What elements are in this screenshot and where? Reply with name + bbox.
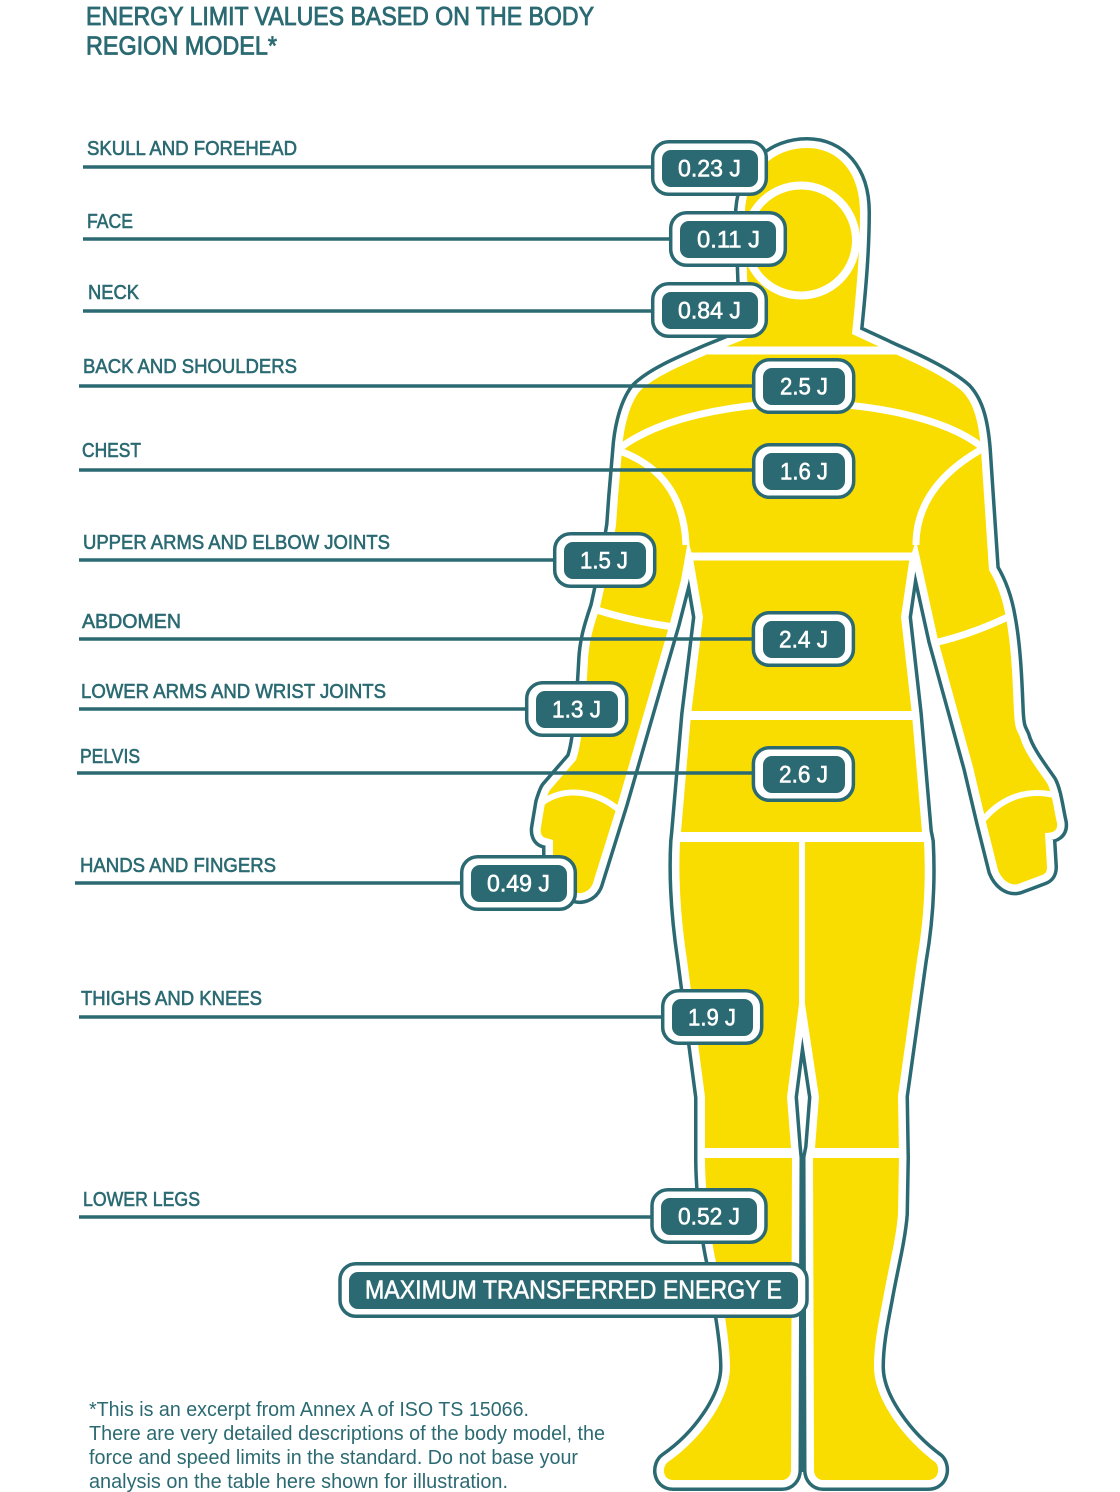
knee left divider xyxy=(700,1148,794,1158)
left wrist divider xyxy=(543,793,619,810)
row: skull and forehead xyxy=(83,138,766,194)
human body figure xyxy=(541,148,1058,1480)
row: hands and fingers: HANDS AND FINGERS xyxy=(80,855,276,877)
row: back and shoulders: BACK AND SHOULDERS xyxy=(83,356,297,378)
knee right divider xyxy=(810,1148,904,1158)
badge 1.9 J xyxy=(663,991,762,1043)
badge 1.6 J: 1.6 J xyxy=(780,458,828,486)
badge 0.52 J xyxy=(652,1190,766,1242)
callout: maximum transferred energy xyxy=(340,1264,807,1316)
row: thighs and knees xyxy=(79,988,762,1043)
badge 1.3 J: 1.3 J xyxy=(552,696,601,724)
badge 2.6 J xyxy=(753,748,853,800)
row: lower arms and wrist joints: LOWER ARMS AND WRIST JOINTS xyxy=(81,681,386,703)
row: pelvis xyxy=(77,746,853,800)
badge 1.5 J xyxy=(555,534,655,586)
badge 2.4 J: 2.4 J xyxy=(779,626,828,654)
right elbow divider xyxy=(934,616,1010,643)
footnote xyxy=(89,1398,605,1492)
badge 0.23 J xyxy=(653,142,766,194)
neck / back divider xyxy=(708,346,896,354)
centre thigh divider xyxy=(799,840,805,1010)
row: back and shoulders xyxy=(79,356,854,412)
back / chest divider xyxy=(620,402,982,448)
badge 2.6 J: 2.6 J xyxy=(779,762,828,788)
title: REGION MODEL* xyxy=(86,30,277,60)
row: chest: CHEST xyxy=(82,440,141,462)
row: lower legs: LOWER LEGS xyxy=(83,1189,200,1211)
badge 0.84 J xyxy=(653,284,766,336)
row: chest xyxy=(79,440,854,497)
badge 0.84 J: 0.84 J xyxy=(678,298,741,324)
row: lower legs xyxy=(79,1189,766,1242)
left shoulder to armpit line xyxy=(620,451,686,545)
abdomen / pelvis divider xyxy=(686,711,918,720)
right wrist divider xyxy=(983,793,1058,820)
row: hands and fingers xyxy=(75,855,575,909)
row: lower arms and wrist joints xyxy=(79,681,627,735)
footnote: force and speed limits in the standard. Do not base your xyxy=(89,1446,578,1469)
row: neck: NECK xyxy=(88,282,140,304)
row: abdomen: ABDOMEN xyxy=(82,611,181,633)
title xyxy=(86,1,594,60)
chest / abdomen divider xyxy=(686,552,916,560)
row: neck xyxy=(83,282,766,336)
badge 0.11 J: 0.11 J xyxy=(697,226,760,254)
row: upper arms and elbow joints xyxy=(79,532,655,586)
row: thighs and knees: THIGHS AND KNEES xyxy=(81,988,262,1010)
badge 0.49 J xyxy=(462,857,575,909)
badge 0.49 J: 0.49 J xyxy=(487,870,550,898)
row: abdomen xyxy=(79,611,853,665)
badge 0.23 J: 0.23 J xyxy=(678,156,741,182)
left elbow divider xyxy=(597,610,674,627)
callout: maximum transferred energy: MAXIMUM TRANSFERRED ENERGY E xyxy=(365,1276,782,1304)
row: skull and forehead: SKULL AND FOREHEAD xyxy=(87,138,297,160)
badge 1.5 J: 1.5 J xyxy=(580,548,628,574)
row: face xyxy=(83,211,785,265)
footnote: There are very detailed descriptions of the body model, the xyxy=(89,1422,605,1445)
badge 1.9 J: 1.9 J xyxy=(688,1004,736,1032)
badge 1.3 J xyxy=(527,683,627,735)
pelvis / thigh divider xyxy=(678,832,926,842)
face region outline xyxy=(746,186,856,296)
footnote: *This is an excerpt from Annex A of ISO TS 15066. xyxy=(89,1398,529,1421)
right shoulder to armpit line xyxy=(916,449,982,545)
badge 0.11 J xyxy=(671,213,785,265)
row: pelvis: PELVIS xyxy=(80,746,140,768)
row: face: FACE xyxy=(87,211,133,233)
row: upper arms and elbow joints: UPPER ARMS AND ELBOW JOINTS xyxy=(83,532,390,554)
badge 2.5 J: 2.5 J xyxy=(780,374,828,400)
badge 2.4 J xyxy=(753,613,853,665)
badge 0.52 J: 0.52 J xyxy=(678,1204,740,1230)
badge 2.5 J xyxy=(754,360,854,412)
badge 1.6 J xyxy=(754,445,854,497)
title: ENERGY LIMIT VALUES BASED ON THE BODY xyxy=(86,1,594,31)
